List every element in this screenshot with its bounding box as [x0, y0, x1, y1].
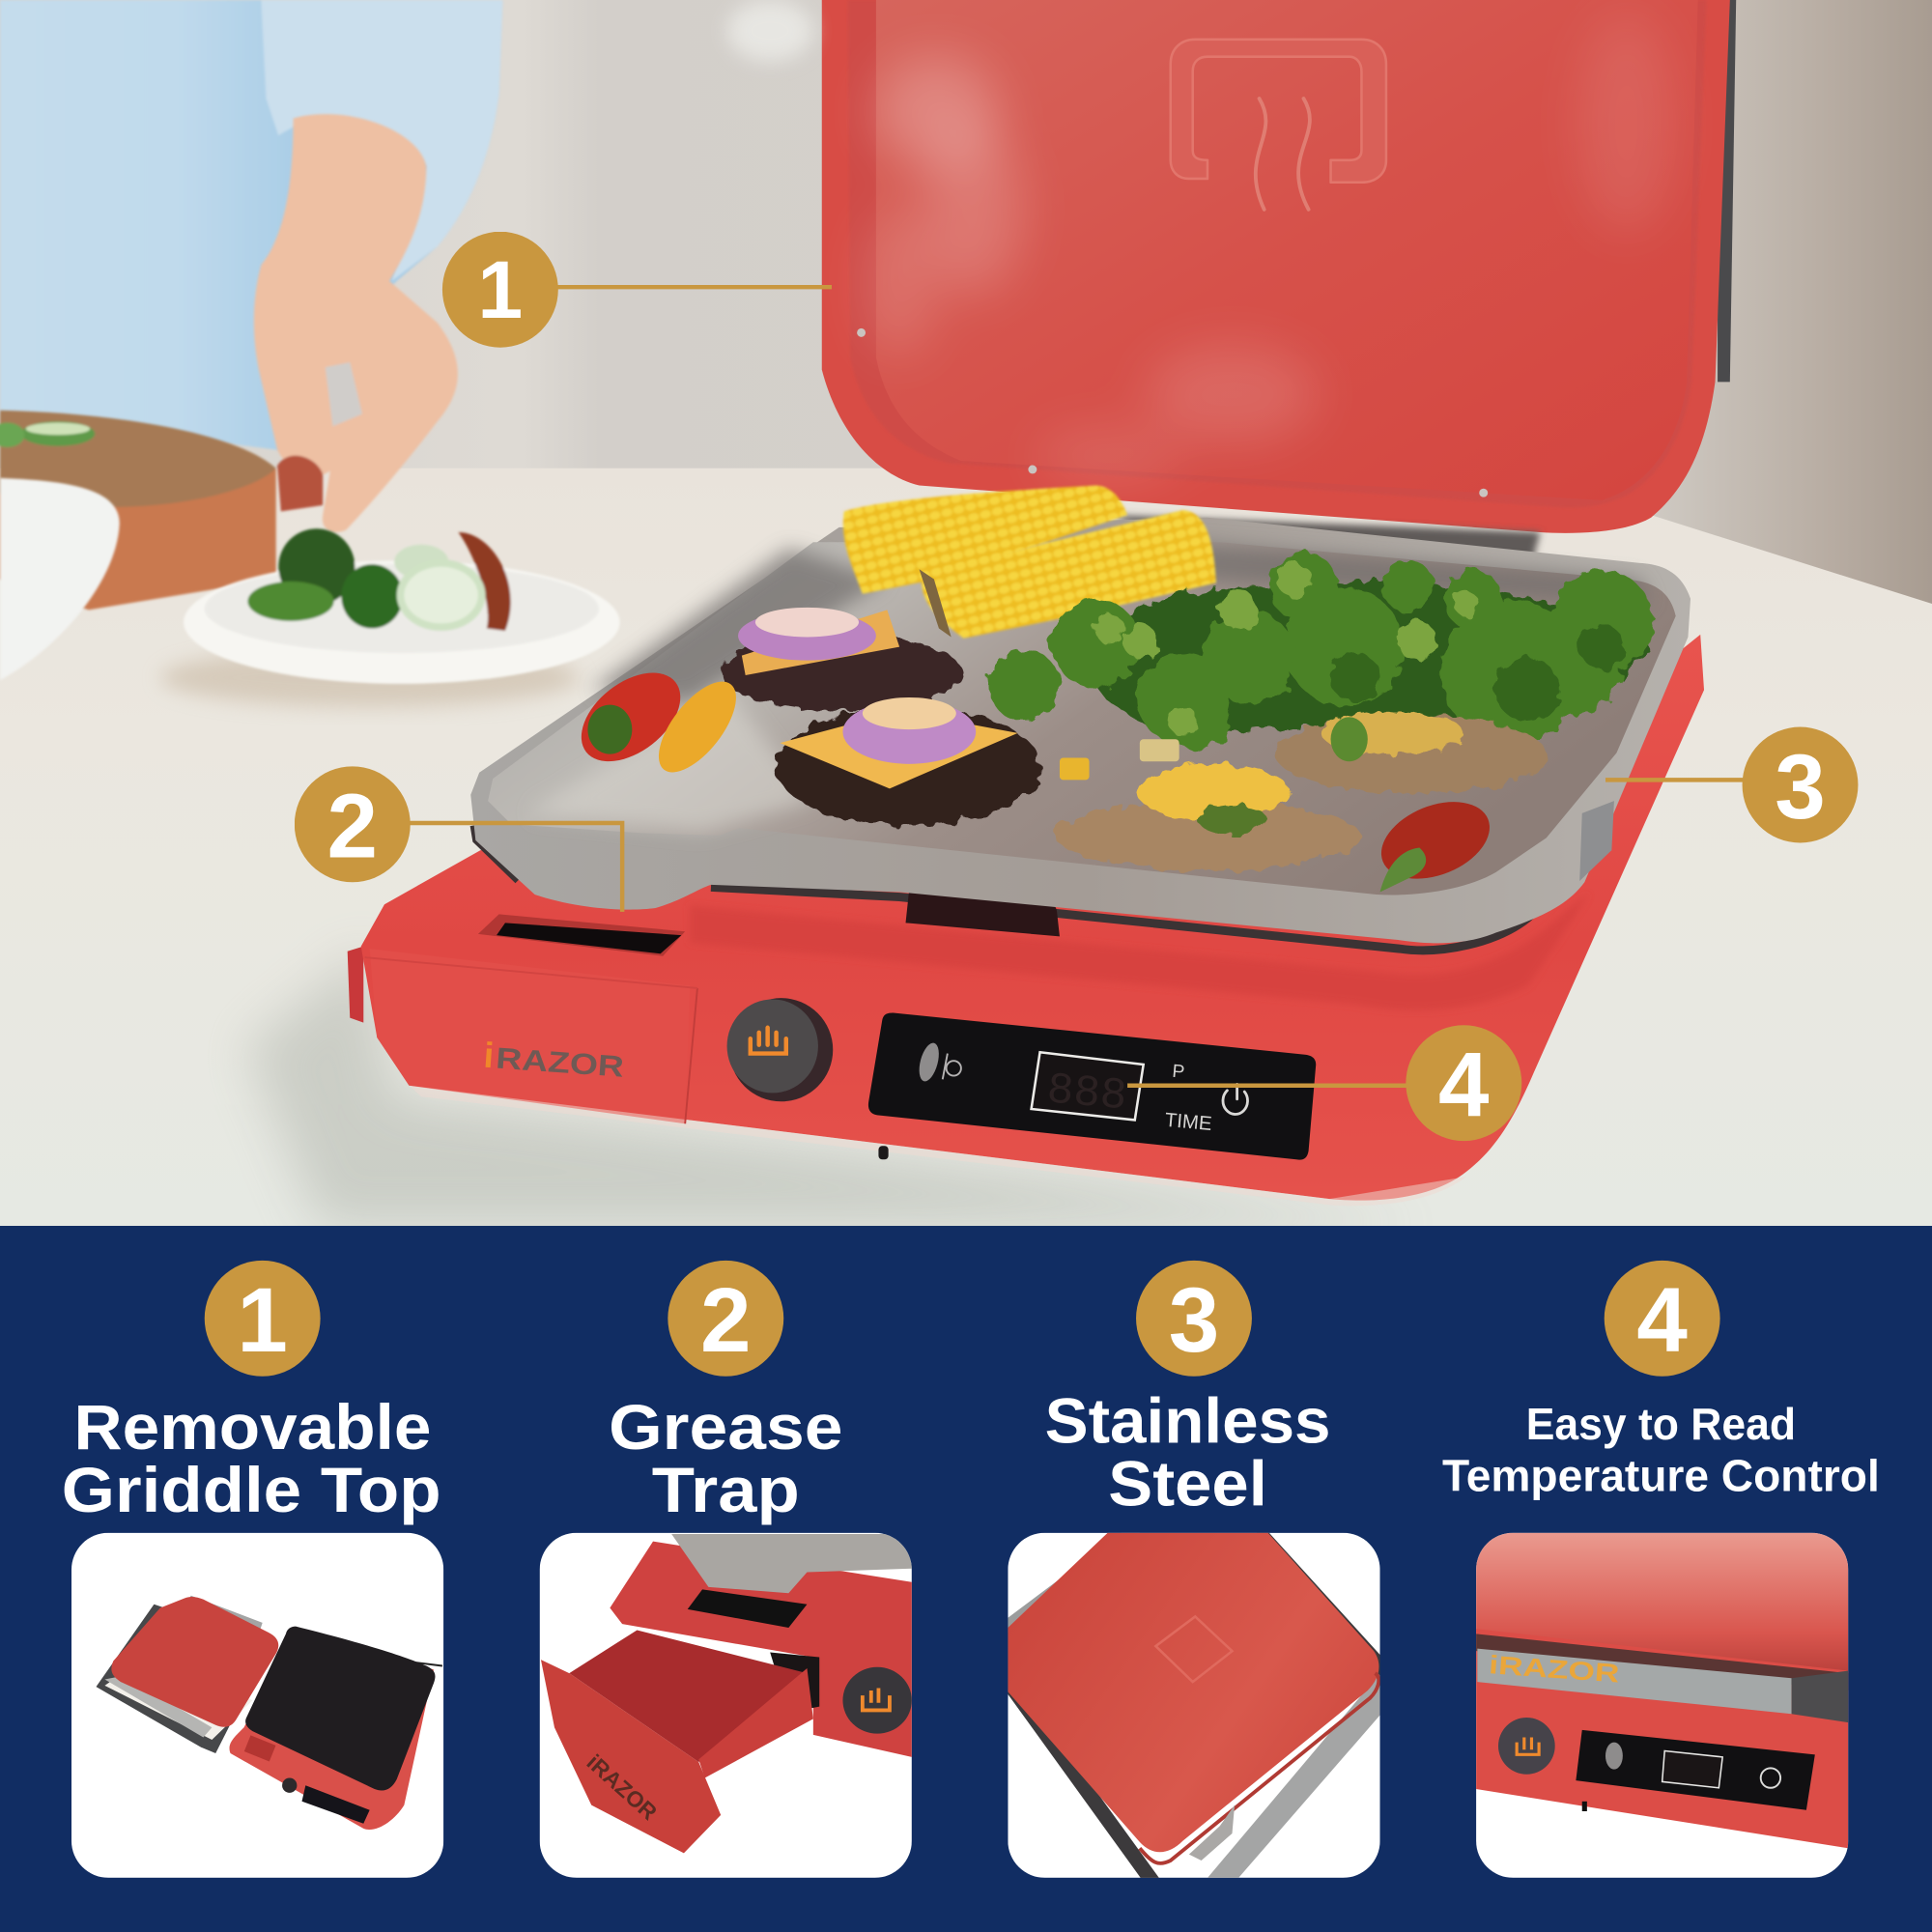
- feature 2: grease trap: [540, 1261, 912, 1878]
- number badge 3: [1136, 1261, 1252, 1377]
- callout badge 1: 1: [477, 244, 523, 335]
- griddle plate gasket: [711, 885, 1534, 954]
- number badge 1: [205, 1261, 321, 1377]
- heading 3: [1045, 1386, 1331, 1520]
- callout badge 1: [442, 232, 558, 348]
- grease trap slot: [478, 914, 685, 956]
- rear hinge shadow: [1109, 515, 1540, 579]
- number badge 4: 4: [1636, 1270, 1688, 1372]
- number badge 4: [1605, 1261, 1720, 1377]
- back wall: [0, 0, 883, 469]
- photo card 4: [1476, 1533, 1848, 1878]
- feature 4: easy to read temperature control: [1442, 1261, 1880, 1878]
- lid hinge clip: [906, 889, 1060, 936]
- griddle lid: [727, 0, 1736, 533]
- number badge 3: 3: [1169, 1270, 1219, 1372]
- photo card 3: [1008, 1533, 1380, 1886]
- control panel: [868, 1012, 1316, 1160]
- heading 1: [62, 1392, 441, 1526]
- griddle base: [348, 635, 1704, 1206]
- brand logo: i: [482, 1036, 496, 1075]
- plate with vegetables: [184, 528, 620, 684]
- table surface: [0, 469, 1932, 1226]
- dark rear reflection: [591, 542, 1651, 702]
- side handle: [1579, 801, 1614, 881]
- photo card 4: iRAZOR: [1488, 1650, 1620, 1689]
- steam: [863, 13, 1676, 483]
- red pepper, front: [1370, 787, 1501, 894]
- photo card 2: [540, 1533, 912, 1878]
- foot: [878, 1146, 889, 1159]
- person: shirt and sleeve: [0, 0, 502, 451]
- heading 4: Temperature Control: [1442, 1450, 1880, 1500]
- burger one: [721, 608, 962, 711]
- brand logo: [482, 1036, 625, 1085]
- heading 3: Stainless: [1045, 1386, 1331, 1458]
- plate shadow on table: [160, 648, 579, 707]
- digital display: [1032, 1052, 1144, 1120]
- lid screws: [857, 328, 1488, 497]
- temperature and time icon: [916, 1040, 961, 1084]
- cooking surface: [488, 542, 1676, 895]
- lid outer shell: [822, 0, 1730, 533]
- broccoli pile: [988, 552, 1654, 751]
- surface reflection: [529, 690, 813, 832]
- heading 2: [609, 1392, 842, 1526]
- callout line 1: [554, 285, 832, 289]
- corn cobs: [843, 486, 1216, 639]
- heading 2: Trap: [652, 1455, 800, 1526]
- grilled chicken with salsa, right: [1275, 712, 1547, 793]
- griddle shadow on table: [243, 958, 1309, 1226]
- heading 1: Griddle Top: [62, 1455, 441, 1526]
- feature 3: stainless steel: [1008, 1261, 1380, 1886]
- front shading ledge: [377, 1036, 685, 1124]
- power button: [1223, 1084, 1248, 1114]
- heading 3: Steel: [1108, 1449, 1267, 1520]
- steel rim: [470, 518, 1690, 943]
- peppers: [565, 655, 751, 784]
- number badge 1: 1: [237, 1270, 288, 1372]
- heading 4: Easy to Read: [1526, 1399, 1796, 1449]
- panel: hero kitchen photo: [0, 0, 1932, 1226]
- griddle plate with food: [470, 486, 1690, 943]
- callout line 2: [407, 823, 622, 912]
- brand logo: RAZOR: [495, 1042, 625, 1084]
- photo card 1: [71, 1533, 443, 1878]
- base ledge shading below griddle plate: [695, 910, 1569, 1008]
- lid inner panel: [876, 0, 1651, 427]
- grilled chicken with salsa, left: [1055, 739, 1360, 870]
- temperature knob: [727, 998, 833, 1101]
- callout line 4: [1127, 1084, 1410, 1087]
- heading 1: Removable: [74, 1392, 431, 1463]
- photo card 2: iRAZOR: [582, 1749, 663, 1825]
- number badge 2: 2: [700, 1270, 752, 1372]
- person: arm and hand: [254, 114, 458, 532]
- drawer seam: [685, 988, 697, 1123]
- control panel: 888: [1045, 1065, 1129, 1122]
- number badge 2: [668, 1261, 783, 1377]
- burger two: [775, 697, 1041, 826]
- panel: navy feature strip: [0, 1226, 1932, 1932]
- white bowl: [0, 478, 120, 680]
- heading 4: [1442, 1399, 1880, 1500]
- right wall: [1651, 0, 1932, 604]
- callout badge 3: 3: [1775, 737, 1826, 838]
- callout badge 2: 2: [327, 777, 378, 878]
- callout badge 2: [295, 766, 411, 882]
- cutting board: [0, 411, 276, 610]
- embossed flame logo: [1171, 40, 1386, 210]
- callout badge 4: [1406, 1025, 1521, 1141]
- heading 2: Grease: [609, 1392, 842, 1463]
- control panel: TIME: [1164, 1110, 1212, 1135]
- callout badge 4: 4: [1438, 1036, 1490, 1137]
- feature 1: removable griddle top: [62, 1261, 443, 1878]
- callout badge 3: [1743, 727, 1858, 842]
- control panel: P: [1172, 1062, 1185, 1083]
- steam wisp at lid edge: [727, 0, 813, 62]
- callout line 3: [1605, 779, 1749, 781]
